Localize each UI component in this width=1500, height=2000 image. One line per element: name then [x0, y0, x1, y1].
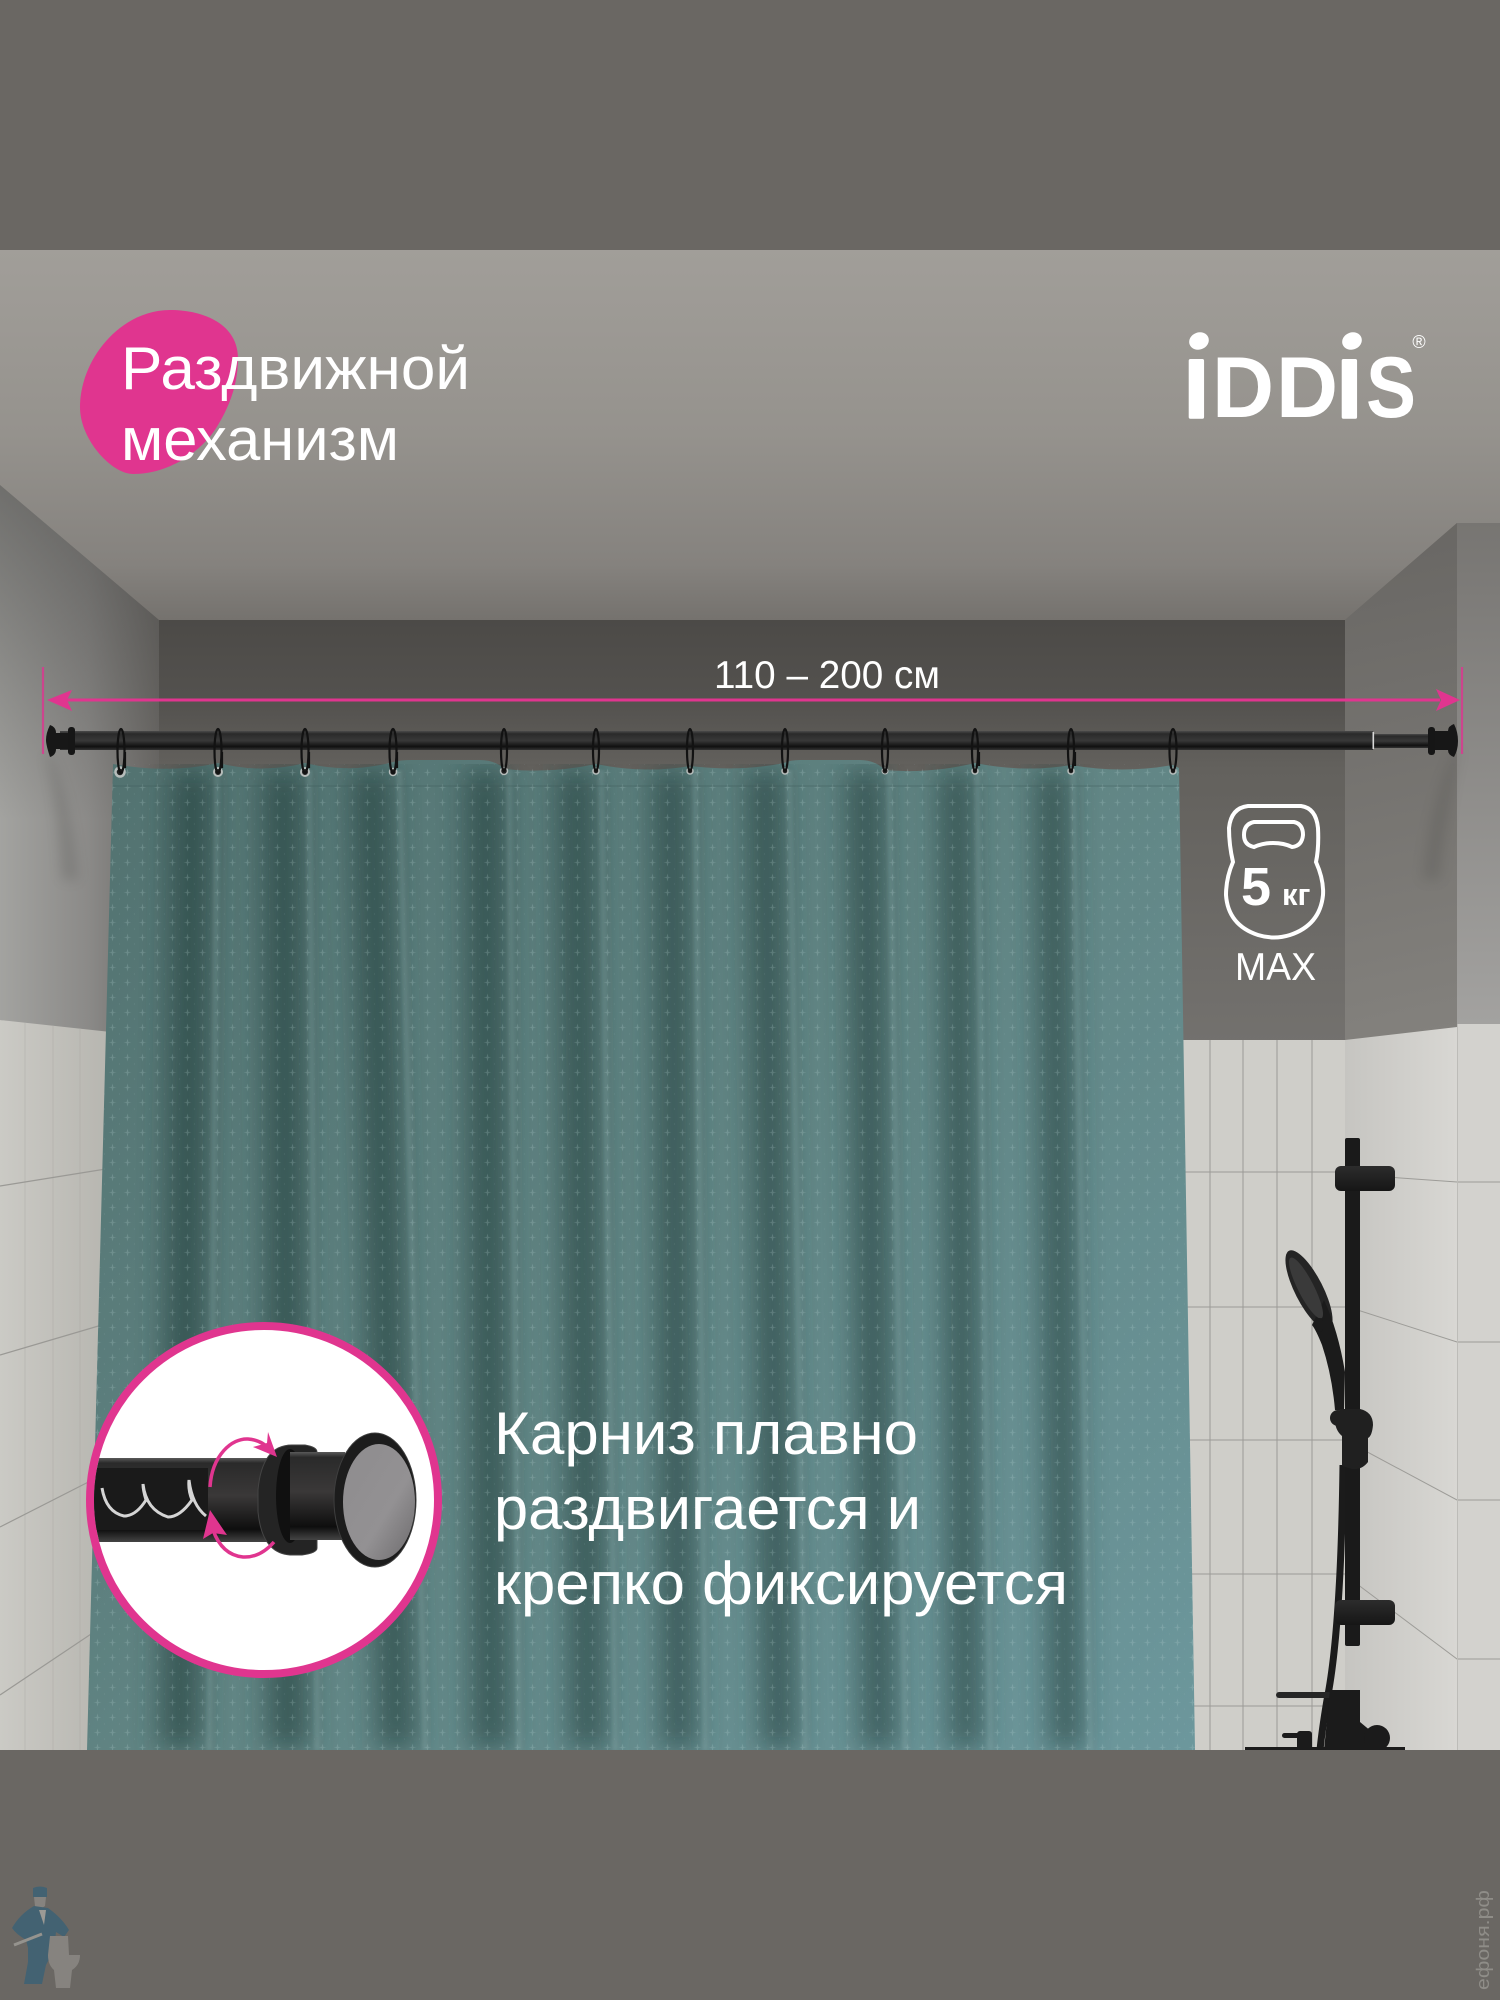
callout text line 3: крепко фиксируется: [494, 1550, 1068, 1617]
IDDIS logo: [1185, 330, 1426, 436]
callout text line 2: раздвигается и: [494, 1475, 921, 1542]
kettlebell load icon: [1226, 806, 1323, 938]
right side wall: [1345, 523, 1457, 1045]
IDDIS logo: D: [1212, 340, 1274, 436]
rail brackets: [1335, 1166, 1395, 1625]
neck: [276, 1449, 345, 1543]
shower holder: [1330, 1409, 1373, 1469]
callout circle: rod mechanism: [90, 1326, 438, 1674]
left wall: [0, 485, 159, 1045]
watermark site text: ефоня.рф: [1473, 1890, 1493, 1990]
mixer faucet: [1245, 1690, 1405, 1751]
left wall tiles: [0, 1020, 120, 1750]
IDDIS logo: ®: [1412, 332, 1426, 352]
kettlebell load icon: кг: [1282, 877, 1311, 912]
rod tube: [90, 1458, 270, 1542]
IDDIS logo: S: [1366, 340, 1416, 436]
rod shadow on wall: [46, 755, 78, 880]
shower hose: [1320, 1465, 1343, 1750]
callout text line 1: Карниз плавно: [494, 1400, 918, 1467]
right side wall tiles: [1345, 1024, 1500, 1750]
right corner wall strip: [1457, 523, 1500, 1028]
bottom band: [0, 1750, 1500, 2000]
cap face: [343, 1444, 415, 1560]
rotation arrows: [203, 1432, 277, 1557]
fabric fold highlights: [206, 770, 1093, 1750]
curtain grommets: [116, 768, 1176, 776]
top band: [0, 0, 1500, 250]
pink blob: [80, 310, 238, 474]
shower rail: [1345, 1138, 1360, 1646]
fabric pattern: [80, 760, 1200, 1750]
width dimension arrow: [43, 667, 1462, 754]
kettlebell load icon: 5: [1241, 857, 1271, 917]
rod slot with spring: [90, 1468, 208, 1530]
IDDIS logo: D: [1276, 340, 1338, 436]
title: Раздвижной: [121, 335, 470, 402]
shower curtain: [80, 760, 1200, 1750]
shower set: [1245, 1138, 1405, 1751]
watermark plumber figure: [12, 1886, 80, 1988]
width dimension label: 110 – 200 см: [714, 654, 940, 697]
hand shower head: [1277, 1244, 1345, 1410]
title second line: механизм: [121, 406, 399, 473]
IDDIS logo: I: [1338, 344, 1361, 435]
curtain rings: [118, 729, 1176, 773]
ceiling: [0, 250, 1500, 620]
fabric fold shadows: [160, 770, 1082, 1750]
collar: [258, 1445, 317, 1555]
end cap: [334, 1433, 416, 1567]
back wall tiles: [1170, 1040, 1345, 1750]
max label: MAX: [1235, 946, 1316, 989]
back wall: [159, 620, 1345, 1045]
curtain rod: [46, 724, 1458, 757]
IDDIS logo: I: [1185, 344, 1208, 435]
